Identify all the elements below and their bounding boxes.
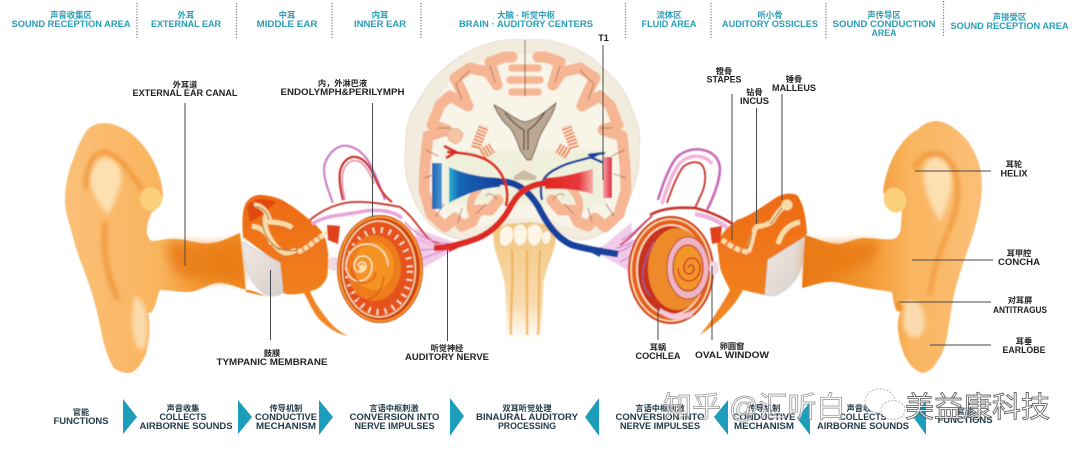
heading: sound reception area: SOUND RECEPTION AREA	[12, 19, 131, 29]
function: binaural auditory processing: BINAURAL AUDITORY	[476, 412, 578, 422]
heading: inner ear	[354, 10, 406, 29]
label: helix	[1000, 159, 1028, 178]
label: tympanic membrane	[216, 348, 328, 367]
label: stapes: STAPES	[706, 74, 742, 84]
label: concha	[998, 248, 1041, 267]
function: conversion into nerve impulses	[350, 403, 440, 431]
function: binaural auditory processing: 双耳听觉处理	[502, 403, 552, 413]
label: helix: 耳轮	[1006, 159, 1022, 169]
function: binaural auditory processing: PROCESSING	[498, 421, 556, 431]
label: endolymph and perilymph: ENDOLYMPH&PERILYMPH	[280, 87, 404, 97]
label: endolymph and perilymph	[280, 78, 404, 97]
heading: sound reception area: 声音收集区	[50, 10, 93, 20]
label: T1: T1	[598, 33, 609, 43]
label: malleus: MALLEUS	[772, 83, 816, 93]
heading: middle ear: MIDDLE EAR	[256, 19, 318, 29]
function: functions left: 官能	[73, 407, 89, 417]
label: oval window: OVAL WINDOW	[695, 350, 770, 360]
arrow 1	[123, 399, 137, 434]
watermark: zhihu account: 知乎 @汇听白	[663, 391, 846, 424]
label: endolymph and perilymph: 内，外淋巴液	[318, 78, 368, 88]
arrow 6	[714, 400, 728, 435]
heading: auditory ossicles: AUDITORY OSSICLES	[722, 19, 818, 29]
header dividers	[137, 1, 944, 38]
heading: external ear: EXTERNAL EAR	[151, 19, 221, 29]
right semicircular canals and nerve	[616, 149, 738, 262]
label: tympanic membrane: TYMPANIC MEMBRANE	[216, 357, 328, 367]
label: external ear canal: EXTERNAL EAR CANAL	[132, 88, 238, 98]
left nerve fan	[415, 228, 462, 270]
heading: brain auditory centers: 大脑 · 听觉中枢	[497, 10, 555, 20]
anatomy labels	[132, 33, 1047, 367]
function: conversion into nerve impulses: 言语中枢刺激	[369, 403, 419, 413]
brainstem	[493, 222, 556, 340]
right outer ear	[802, 121, 982, 373]
function: conversion into nerve impulses: CONVERSION INTO	[350, 412, 440, 422]
right nerve fan	[596, 222, 632, 272]
heading: inner ear: INNER EAR	[354, 19, 406, 29]
label: external ear canal: 外耳道	[173, 80, 197, 90]
heading: brain auditory centers	[459, 10, 593, 29]
label: auditory nerve	[405, 343, 489, 362]
label: tympanic membrane: 鼓膜	[264, 348, 280, 358]
illustration: auditory pathway	[65, 40, 982, 373]
heading: auditory ossicles	[722, 10, 818, 29]
heading: sound reception area	[12, 10, 131, 29]
function: conductive mechanism: 传导机制	[270, 403, 302, 413]
arrow 8	[914, 400, 926, 435]
left semicircular canals and nerve	[310, 146, 468, 262]
heading: sound conduction area: AREA	[872, 28, 897, 38]
heading: external ear: 外耳	[178, 10, 195, 20]
left outer ear	[65, 123, 273, 373]
heading: sound reception area right	[950, 12, 1069, 31]
heading: sound conduction area: SOUND CONDUCTION	[832, 19, 936, 29]
function: conductive right: MECHANISM	[734, 421, 794, 431]
heading: sound reception area right: 声接受区	[993, 12, 1027, 22]
function: functions left	[54, 407, 108, 426]
heading: sound conduction area	[832, 10, 936, 38]
label: concha: CONCHA	[998, 257, 1041, 267]
right middle ear and tympanic membrane	[700, 194, 807, 335]
label: oval window	[695, 341, 770, 360]
function: conductive right	[732, 403, 796, 431]
functions row	[54, 398, 992, 436]
function: collects right	[817, 403, 909, 431]
function: conversion right	[616, 403, 704, 431]
function: functions right: FUNCTIONS	[938, 415, 992, 425]
label: cochlea	[636, 342, 681, 361]
header row	[12, 10, 1069, 38]
function: conversion right: NERVE IMPULSES	[620, 421, 700, 431]
label: earlobe	[1002, 336, 1046, 355]
label: concha: 耳甲腔	[1007, 248, 1031, 258]
label: helix: HELIX	[1000, 168, 1028, 178]
function: conversion right: CONVERSION INTO	[616, 412, 704, 422]
heading: fluid area: FLUID AREA	[642, 19, 697, 29]
heading: fluid area	[642, 10, 697, 29]
label: stapes	[706, 66, 742, 84]
function: collects right: 声音收集	[847, 403, 879, 413]
heading: middle ear: 中耳	[279, 10, 296, 20]
arrow 3	[319, 400, 333, 435]
label: oval window: 卵圆窗	[720, 341, 744, 351]
label: auditory nerve: AUDITORY NERVE	[405, 352, 489, 362]
function: conductive mechanism: CONDUCTIVE	[255, 412, 317, 422]
heading: fluid area: 流体区	[656, 10, 682, 20]
heading: sound conduction area: 声传导区	[867, 10, 901, 20]
heading: external ear	[151, 10, 221, 29]
function: conductive right: CONDUCTIVE	[732, 412, 796, 422]
label: auditory nerve: 听觉神经	[431, 343, 464, 353]
label: antitragus: ANTITRAGUS	[993, 305, 1047, 315]
label: incus: 钻骨	[746, 87, 763, 97]
function: functions left: FUNCTIONS	[54, 416, 108, 426]
label: cochlea: COCHLEA	[636, 351, 681, 361]
right cochlea	[628, 216, 714, 324]
label: incus	[740, 87, 769, 106]
label: stapes: 镫骨	[716, 66, 732, 76]
function: collects airborne sounds: 声音收集	[167, 403, 199, 413]
heading: sound reception area right: SOUND RECEPTION AREA	[950, 21, 1069, 31]
left cochlea	[337, 215, 423, 323]
function: functions right	[938, 406, 992, 425]
label: malleus	[772, 74, 816, 93]
function: conductive mechanism	[255, 403, 317, 431]
watermark: company name: 美益康科技	[905, 391, 1050, 424]
arrow 4	[450, 398, 464, 436]
function: binaural auditory processing	[476, 403, 578, 431]
auditory pathways: blue and red	[432, 146, 618, 257]
label: malleus: 锤骨	[786, 74, 802, 84]
label: antitragus	[993, 295, 1047, 315]
function: collects airborne sounds	[140, 403, 232, 431]
function: functions right: 官能	[957, 406, 973, 416]
leader lines	[185, 45, 993, 345]
watermark	[663, 389, 1050, 424]
arrow 5	[585, 398, 599, 436]
function: collects right: AIRBORNE SOUNDS	[817, 421, 909, 431]
label: earlobe: 耳垂	[1016, 336, 1032, 346]
right cortex folds	[525, 57, 626, 227]
icon: wechat bubbles	[865, 389, 905, 420]
function: collects airborne sounds: COLLECTS	[160, 412, 206, 422]
label: incus: INCUS	[740, 96, 769, 106]
heading: inner ear: 内耳	[372, 10, 389, 20]
function: conductive right: 传导机制	[748, 403, 780, 413]
brain section	[405, 40, 640, 240]
label: cochlea: 耳蜗	[650, 342, 666, 352]
label: external ear canal	[132, 80, 238, 98]
function: conductive mechanism: MECHANISM	[256, 421, 316, 431]
function: conversion right: 言语中枢刺激	[635, 403, 685, 413]
label: earlobe: EARLOBE	[1002, 345, 1046, 355]
left tympanic membrane and middle ear	[242, 195, 348, 336]
heading: middle ear	[256, 10, 318, 29]
heading: brain auditory centers: BRAIN · AUDITORY CENTERS	[459, 19, 593, 29]
function: collects airborne sounds: AIRBORNE SOUNDS	[140, 421, 232, 431]
arrow 2	[238, 400, 252, 434]
arrow 7	[797, 402, 810, 435]
function: collects right: COLLECTS	[840, 412, 886, 422]
function: conversion into nerve impulses: NERVE IMPULSES	[354, 421, 434, 431]
heading: auditory ossicles: 听小骨	[757, 10, 783, 20]
label: antitragus: 对耳屏	[1008, 295, 1032, 305]
left cortex folds	[424, 57, 524, 227]
